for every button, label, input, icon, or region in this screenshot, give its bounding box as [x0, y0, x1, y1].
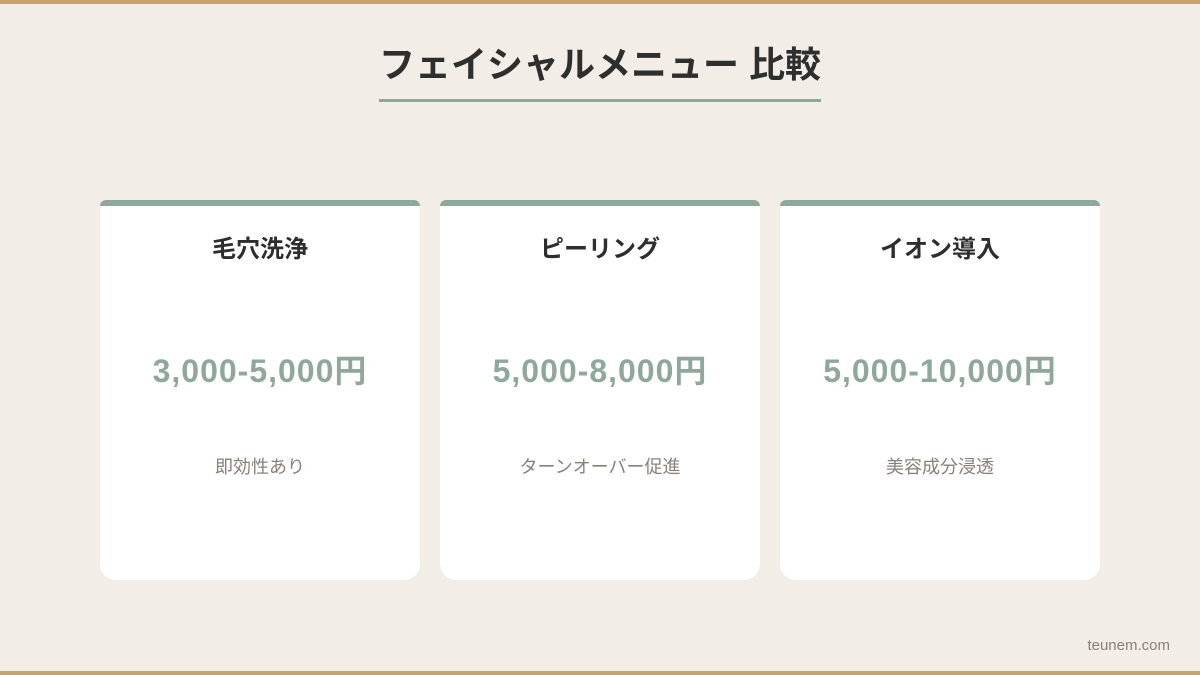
price: 3,000-5,000円	[153, 353, 367, 389]
description: ターンオーバー促進	[520, 457, 680, 477]
footer: teunem.com	[1087, 637, 1170, 654]
heading: イオン導入: イオン導入	[880, 236, 1000, 263]
price: 5,000-8,000円	[493, 353, 707, 389]
description: 美容成分浸透	[886, 457, 994, 477]
price: 5,000-10,000円	[823, 353, 1057, 389]
heading: 毛穴洗浄: 毛穴洗浄	[212, 236, 308, 263]
panel: イオン導入	[780, 200, 1100, 580]
panel: 毛穴洗浄	[100, 200, 420, 580]
panel: ピーリング	[440, 200, 760, 580]
heading: ピーリング: ピーリング	[540, 236, 660, 263]
title: フェイシャルメニュー 比較	[379, 44, 821, 85]
description: 即効性あり	[215, 457, 305, 477]
